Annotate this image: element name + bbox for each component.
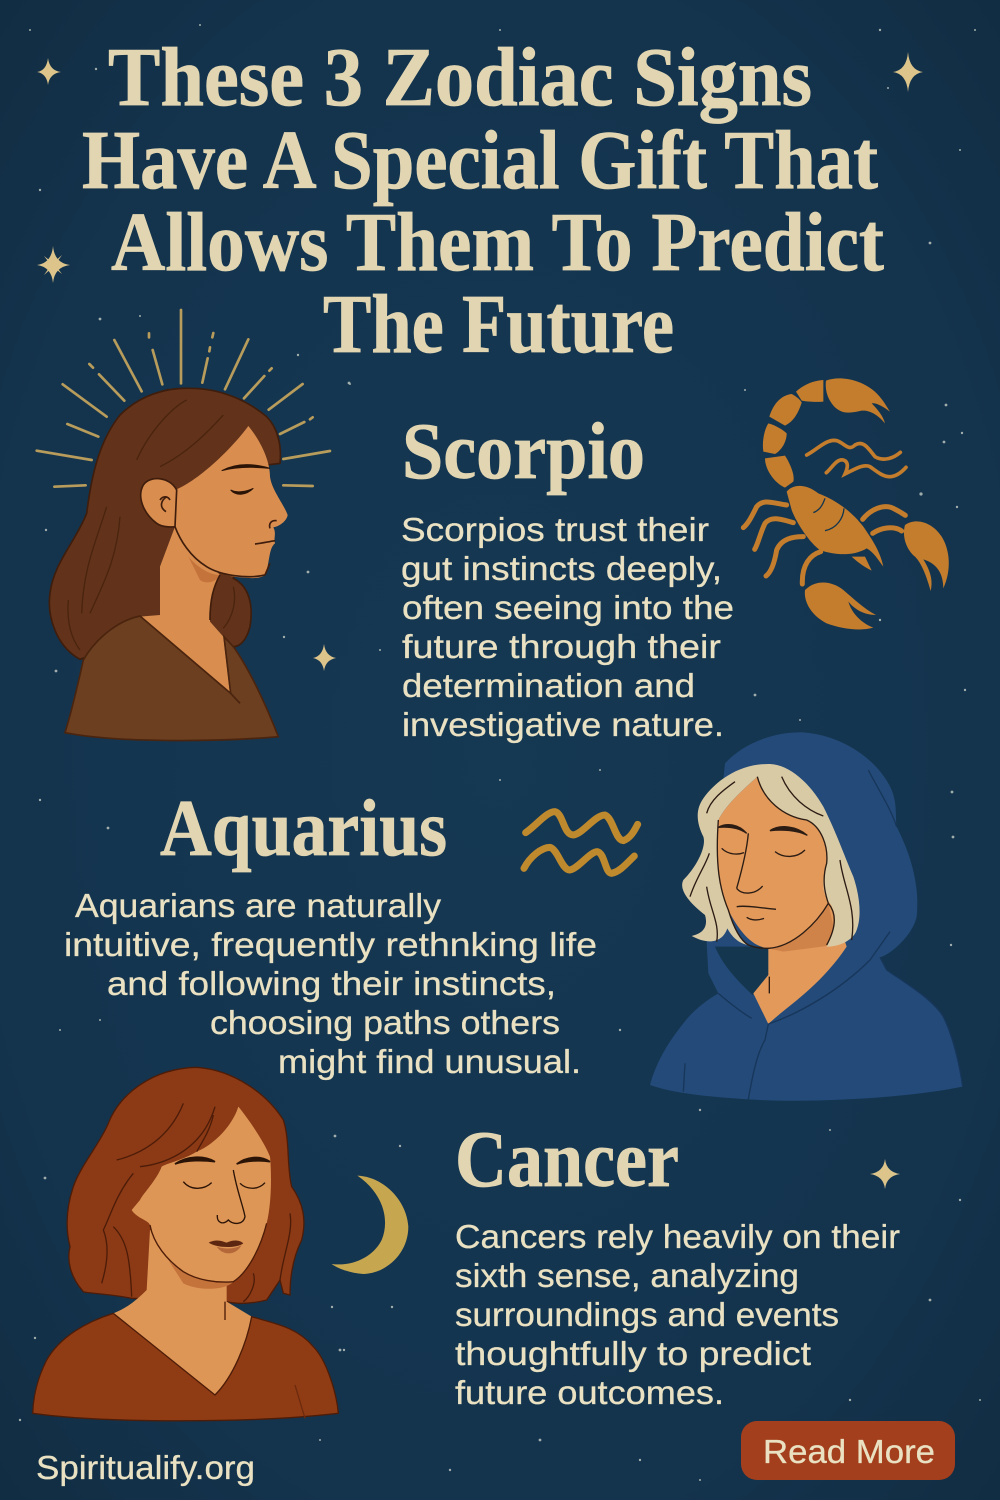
panel: Cancer bbox=[33, 1067, 900, 1421]
heading: Cancer bbox=[455, 1116, 679, 1204]
text block: choosing paths others bbox=[210, 1004, 560, 1041]
title bbox=[82, 31, 884, 371]
text block: Cancers rely heavily on their bbox=[455, 1218, 900, 1255]
button: Read More: Read More bbox=[763, 1433, 935, 1470]
icon: scorpion bbox=[743, 378, 949, 629]
text block: Aquarians are naturally bbox=[75, 887, 442, 924]
illustration: hooded person with grey hair bbox=[650, 732, 963, 1101]
icon: sparkle stars bbox=[37, 52, 923, 1189]
brand label: Spiritualify.org bbox=[36, 1449, 255, 1486]
text block: investigative nature. bbox=[402, 706, 724, 743]
text block bbox=[401, 511, 734, 743]
title: These 3 Zodiac Signs bbox=[108, 31, 812, 124]
text block: Scorpios trust their bbox=[401, 511, 709, 548]
text block: and following their instincts, bbox=[107, 965, 556, 1002]
illustration: woman in profile with halo bbox=[37, 310, 330, 741]
text block bbox=[455, 1218, 900, 1411]
icon: crescent moon bbox=[332, 1176, 408, 1274]
heading: Aquarius bbox=[160, 785, 447, 873]
text block: future outcomes. bbox=[455, 1374, 724, 1411]
text block: gut instincts deeply, bbox=[401, 550, 722, 587]
text block: thoughtfully to predict bbox=[455, 1335, 811, 1372]
halo rays bbox=[37, 310, 330, 487]
text block: sixth sense, analyzing bbox=[455, 1257, 799, 1294]
text block: intuitive, frequently rethnking life bbox=[64, 926, 597, 963]
text block: future through their bbox=[402, 628, 721, 665]
text block: surroundings and events bbox=[455, 1296, 839, 1333]
text block: often seeing into the bbox=[402, 589, 734, 626]
text block: might find unusual. bbox=[278, 1043, 581, 1080]
heading: Scorpio bbox=[402, 408, 645, 496]
icon: aquarius symbol bbox=[524, 812, 638, 873]
button: Read More bbox=[741, 1421, 955, 1480]
title: Allows Them To Predict bbox=[111, 196, 884, 289]
text block: determination and bbox=[402, 667, 695, 704]
panel: Aquarius bbox=[64, 732, 963, 1101]
text block bbox=[64, 887, 597, 1080]
title: The Future bbox=[323, 278, 674, 371]
illustration: woman with auburn hair bbox=[33, 1067, 338, 1421]
panel: Scorpio bbox=[37, 310, 949, 743]
title: Have A Special Gift That bbox=[82, 114, 878, 207]
